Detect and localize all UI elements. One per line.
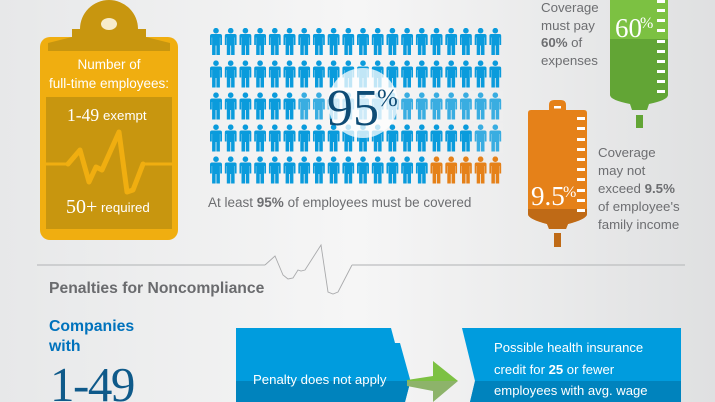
clipboard: number of full-time employees [40, 0, 178, 240]
caption: employees covered: At least 95% of employees must be covered [208, 195, 471, 210]
clipboard: number of full-time employees: 50+ [66, 196, 97, 218]
heading: penalties for noncompliance: Penalties for Noncompliance [49, 280, 265, 297]
panel: possible health insurance credit: Possible health insurance [494, 340, 643, 355]
divider: heartbeat line [37, 245, 685, 294]
panel: possible health insurance credit: employees with avg. wage [494, 383, 648, 398]
panel: possible health insurance credit: 25 or fewer [549, 362, 614, 377]
callout: 95%: 95 [327, 80, 379, 137]
text: coverage may not exceed 9.5%: Coverage [598, 145, 656, 160]
text: coverage may not exceed 9.5%: exceed [598, 181, 645, 196]
callout: 95%: % [377, 85, 398, 112]
panel: possible health insurance credit [462, 328, 681, 402]
text: coverage may not exceed 9.5%: of employee's [598, 199, 680, 214]
clipboard: number of full-time employees: Number of [77, 57, 141, 72]
text: coverage must pay 60%: expenses [541, 53, 598, 68]
text: coverage must pay 60%: 60% [541, 35, 568, 50]
text: coverage may not exceed 9.5%: family income [598, 217, 679, 232]
panel: possible health insurance credit: credit for [494, 362, 549, 377]
callout: 95% [327, 68, 398, 138]
icon: orange IV bag 9.5%: % [563, 184, 576, 201]
icon: green IV bag 60%: % [640, 15, 653, 32]
panel: penalty does not apply [236, 328, 410, 402]
clipboard: number of full-time employees: required [101, 200, 150, 215]
arrow: green [407, 361, 458, 402]
clipboard: number of full-time employees: exempt [103, 108, 147, 123]
icon: green IV bag 60% [610, 0, 668, 128]
icon: orange IV bag 9.5% [528, 100, 587, 247]
clipboard: number of full-time employees: 1-49 [67, 105, 99, 125]
text: coverage must pay 60%: must pay [541, 18, 595, 33]
text: coverage must pay 60%: Coverage [541, 0, 599, 15]
text: coverage may not exceed 9.5%: may not [598, 163, 646, 178]
pictogram: 100 employees, 95 covered [210, 28, 503, 184]
text: coverage must pay 60%: of [571, 35, 583, 50]
clipboard: number of full-time employees: full-time employees: [49, 76, 169, 91]
heading: companies with 1-49 [48, 318, 134, 402]
heading: companies with 1-49: with [48, 338, 81, 355]
text: coverage may not exceed 9.5%: 9.5% [645, 181, 675, 196]
heading: companies with 1-49: Companies [49, 318, 134, 335]
icon: orange IV bag 9.5%: 9.5 [531, 181, 565, 211]
panel: penalty does not apply: Penalty does not apply [253, 372, 387, 387]
icon: green IV bag 60%: 60 [615, 13, 642, 43]
